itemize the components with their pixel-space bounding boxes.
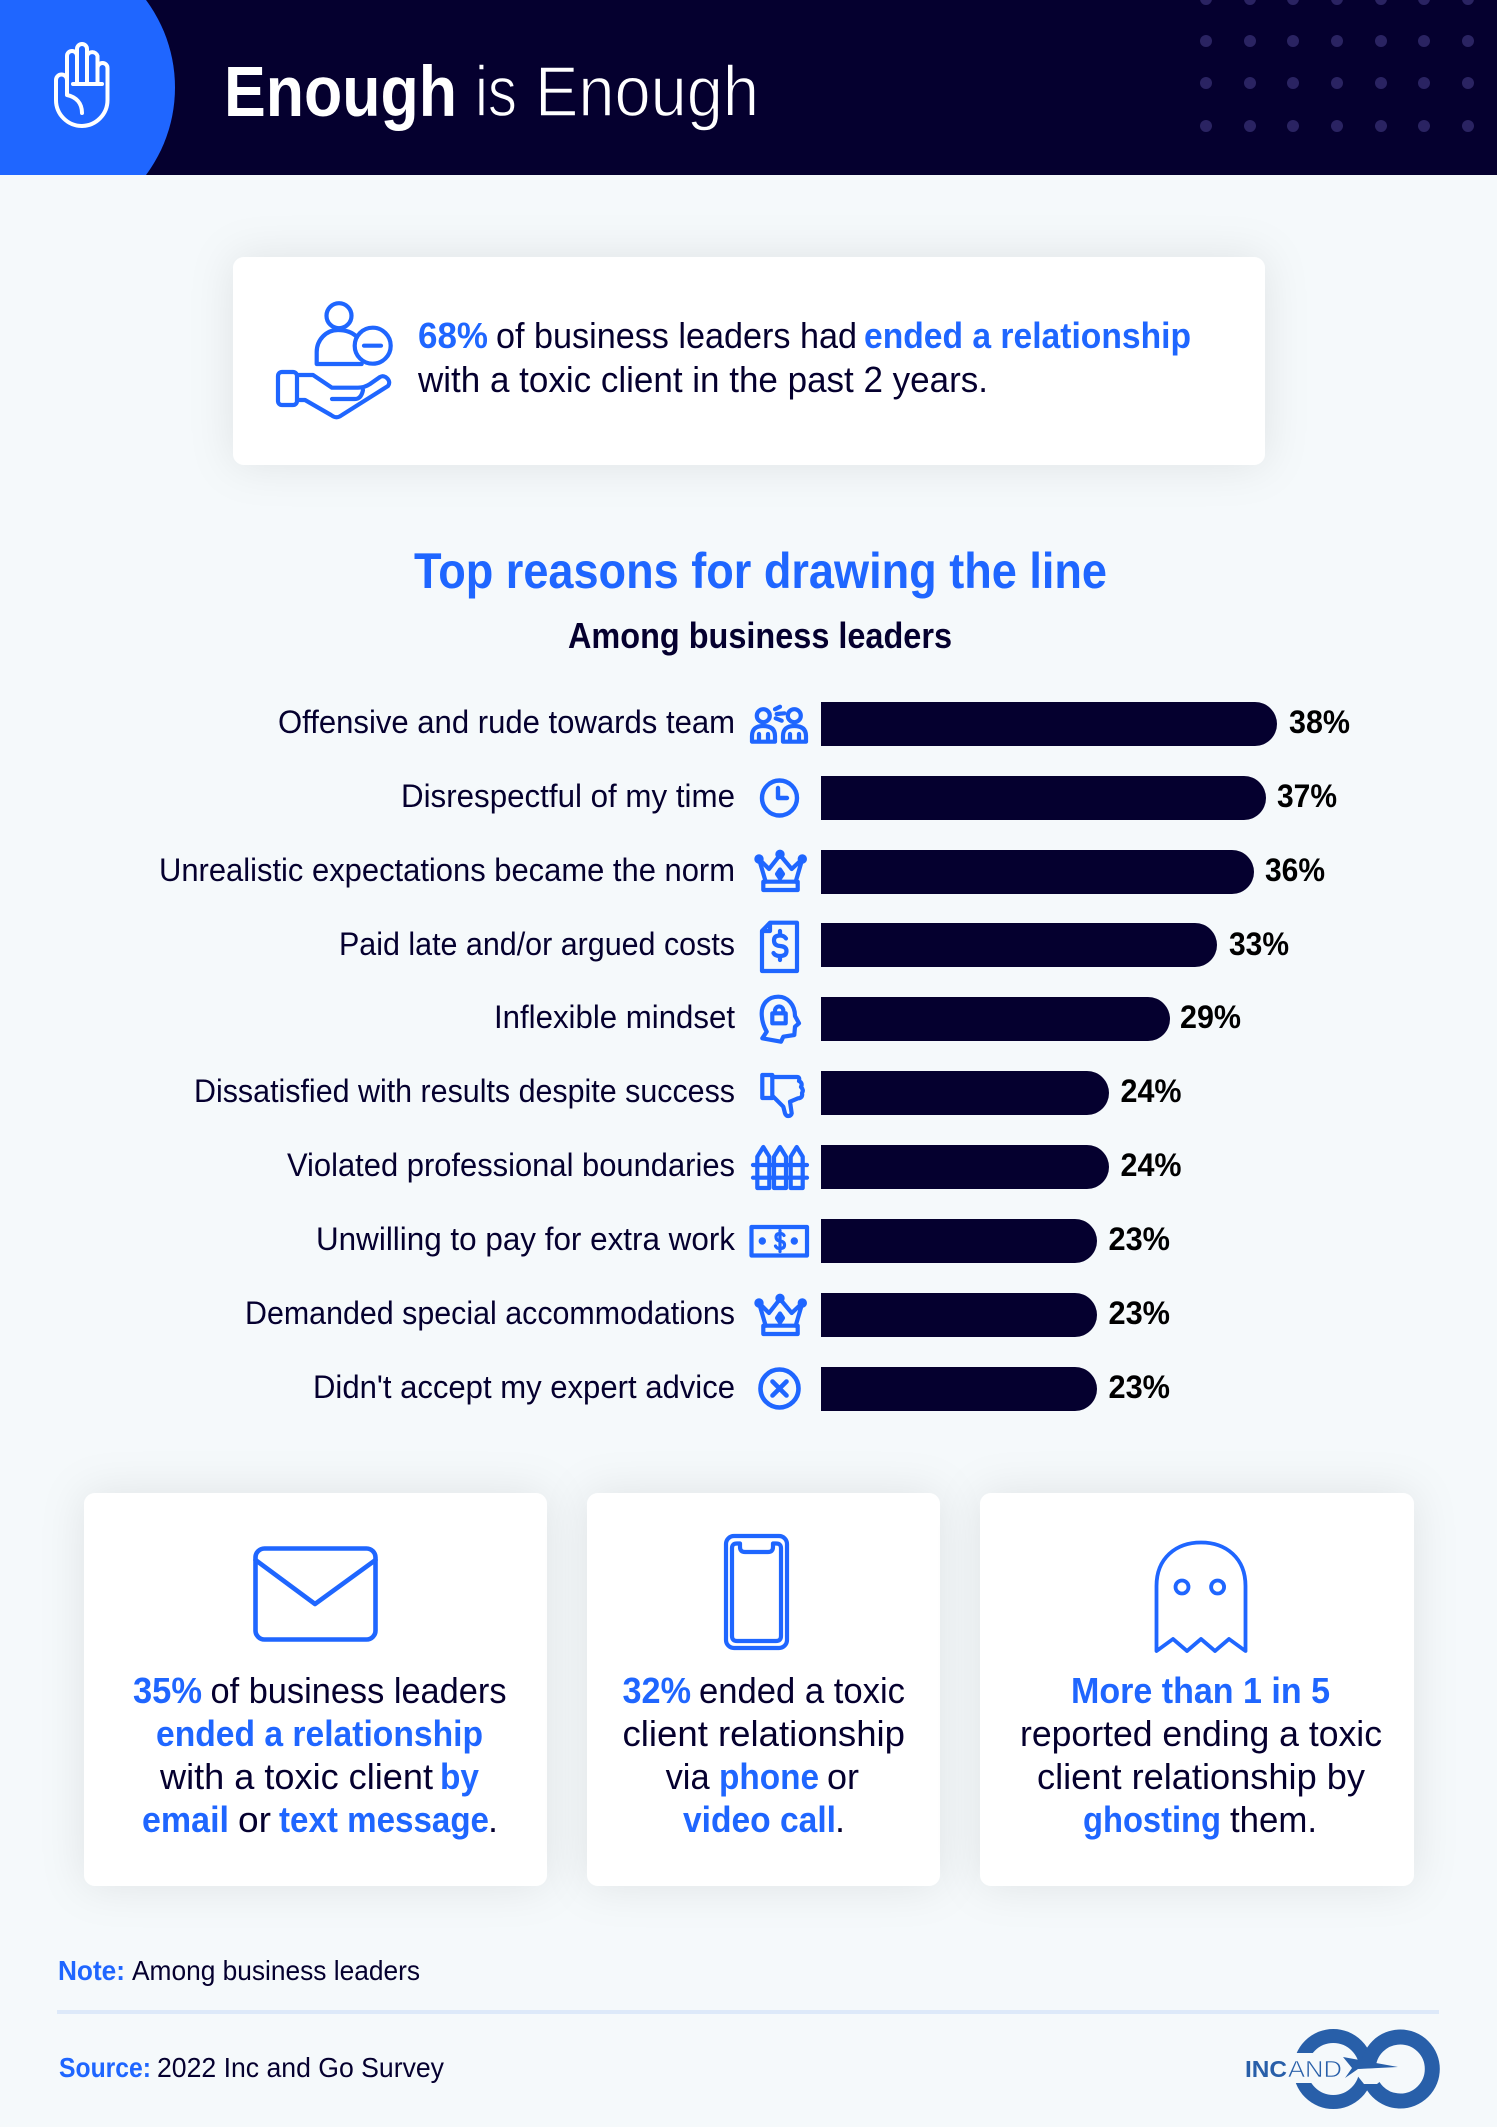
- icon: smartphone: [726, 1536, 787, 1648]
- email text: with a toxic client: [159, 1756, 433, 1797]
- title: is: [475, 53, 517, 132]
- logo: Inc and Go: AND: [1288, 2056, 1342, 2082]
- callout text: of business leaders had: [496, 315, 857, 356]
- bar chart: [159, 702, 1350, 1411]
- row: violated boundaries: Violated professional boundaries: [287, 1147, 735, 1183]
- row: violated boundaries: [287, 1145, 1182, 1189]
- email text: or: [238, 1799, 271, 1840]
- callout text: ended a relationship: [864, 315, 1191, 356]
- title: Enough: [535, 53, 759, 132]
- ghost text: them.: [1230, 1799, 1317, 1840]
- ghost text: client relationship by: [1037, 1756, 1365, 1797]
- row: unwilling to pay: [316, 1219, 1170, 1263]
- email text: ended a relationship: [156, 1713, 483, 1754]
- row: inflexible mindset: 29%: [1180, 999, 1241, 1035]
- title: Enough: [224, 53, 457, 132]
- email text: of business leaders: [210, 1670, 506, 1711]
- blue circle badge: [0, 0, 175, 175]
- note: Among business leaders: [132, 1955, 420, 1986]
- note: Note:: [58, 1955, 125, 1986]
- phone text: .: [835, 1799, 845, 1840]
- row: demanded special: Demanded special accommodations: [245, 1295, 735, 1331]
- logo: Inc and Go: [1240, 2036, 1432, 2102]
- row: disrespectful: 37%: [1277, 778, 1337, 814]
- email text: by: [440, 1756, 479, 1797]
- row: unwilling to pay: 23%: [1108, 1221, 1170, 1257]
- panel: email: [84, 1493, 547, 1886]
- row: offensive and rude: Offensive and rude towards team: [278, 704, 735, 740]
- row: offensive and rude: 38%: [1289, 704, 1350, 740]
- ghost text: More than 1 in 5: [1071, 1670, 1330, 1711]
- ghost text: ghosting: [1083, 1799, 1221, 1840]
- panel: ghost: [980, 1493, 1414, 1886]
- phone text: 32%: [622, 1670, 691, 1711]
- row: dissatisfied: [194, 1071, 1182, 1116]
- row: paid late: [339, 923, 1289, 971]
- callout text: 68%: [418, 315, 488, 356]
- row: inflexible mindset: Inflexible mindset: [494, 999, 735, 1035]
- phone text: phone: [719, 1756, 819, 1797]
- source: 2022 Inc and Go Survey: [157, 2052, 444, 2083]
- row: dissatisfied: Dissatisfied with results despite success: [194, 1073, 735, 1109]
- row: didn't accept advice: Didn't accept my expert advice: [313, 1369, 735, 1405]
- panel: phone: [587, 1493, 940, 1886]
- dot pattern: [1200, 0, 1474, 132]
- ghost text: reported ending a toxic: [1020, 1713, 1382, 1754]
- logo: Inc and Go: INC: [1245, 2056, 1287, 2082]
- email text: email: [142, 1799, 229, 1840]
- row: demanded special: 23%: [1108, 1295, 1170, 1331]
- row: unrealistic: 36%: [1265, 852, 1325, 888]
- row: unrealistic: Unrealistic expectations became the norm: [159, 852, 735, 888]
- phone text: video call: [683, 1799, 836, 1840]
- row: demanded special: [245, 1293, 1170, 1337]
- panel: 68% callout: [233, 257, 1265, 465]
- email text: 35%: [133, 1670, 202, 1711]
- row: violated boundaries: 24%: [1120, 1147, 1182, 1183]
- row: unwilling to pay: Unwilling to pay for extra work: [316, 1221, 736, 1257]
- row: dissatisfied: 24%: [1120, 1073, 1182, 1109]
- icon: envelope: [256, 1548, 376, 1640]
- row: paid late: Paid late and/or argued costs: [339, 926, 735, 962]
- row: disrespectful: [401, 776, 1337, 820]
- row: unrealistic: [159, 850, 1325, 894]
- row: didn't accept advice: 23%: [1108, 1369, 1170, 1405]
- phone text: ended a toxic: [699, 1670, 905, 1711]
- callout text: with a toxic client in the past 2 years.: [417, 359, 988, 400]
- icon: raised hand: [56, 44, 108, 126]
- header banner: [0, 0, 1497, 175]
- source: Source:: [59, 2052, 151, 2083]
- row: offensive and rude: [278, 702, 1350, 746]
- email text: text message: [279, 1799, 489, 1840]
- row: disrespectful: Disrespectful of my time: [401, 778, 735, 814]
- phone text: client relationship: [622, 1713, 905, 1754]
- row: inflexible mindset: [494, 997, 1241, 1042]
- row: paid late: 33%: [1229, 926, 1289, 962]
- heading: top reasons: Top reasons for drawing the line: [414, 543, 1107, 599]
- subheading: Among business leaders: [568, 615, 952, 656]
- phone text: or: [827, 1756, 859, 1797]
- phone text: via: [666, 1756, 711, 1797]
- email text: .: [488, 1799, 498, 1840]
- icon: ghost: [1156, 1542, 1246, 1651]
- row: didn't accept advice: [313, 1367, 1170, 1411]
- icon: person removed on open hand: [278, 303, 391, 417]
